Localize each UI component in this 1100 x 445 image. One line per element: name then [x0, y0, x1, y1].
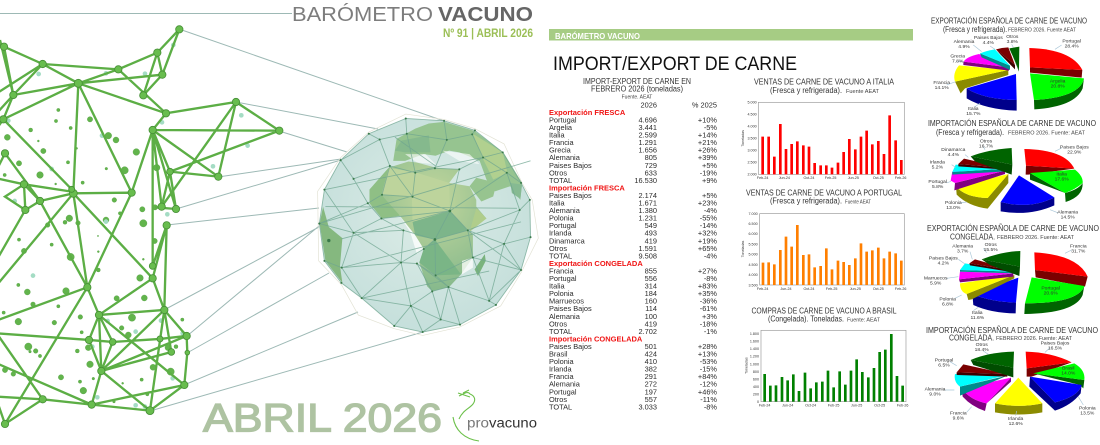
table: importación fresca: Dinamarca	[549, 236, 586, 245]
table: exportación fresca: Paises Bajos	[549, 161, 592, 170]
bar chart: compras a Brasil: Feb-26	[897, 403, 908, 407]
table: exportación congelada: Portugal	[549, 274, 577, 283]
pie 2 title: FEBRERO 2026. Fuente: AEAT	[1008, 130, 1085, 136]
table: exportación congelada	[549, 259, 717, 336]
table: exportación fresca: Italia	[549, 131, 566, 140]
section bar	[549, 29, 913, 41]
bar chart: compras a Brasil: 0	[757, 400, 759, 404]
table: importación fresca: 493	[645, 229, 657, 238]
bar chart: compras a Brasil: Jun-25	[851, 403, 862, 407]
table heading: IMPORT-EXPORT DE CARNE EN	[583, 77, 691, 86]
table: exportación fresca: Portugal	[549, 116, 577, 124]
table: exportación congelada: Alemania	[549, 312, 581, 321]
bar chart: compras a Brasil: Oct-24	[805, 403, 816, 407]
chart heading: compras a Brasil: COMPRAS DE CARNE DE VACUNO A BRASIL	[752, 306, 897, 316]
pie 1 graphic: Grecia	[950, 53, 965, 59]
table: importación congelada: Otros	[549, 395, 567, 404]
pie 1 graphic: 20.8%	[1051, 84, 1065, 90]
table heading: Fuente. AEAT	[622, 94, 652, 100]
pie 1 graphic: Paises Bajos	[974, 35, 1003, 41]
header: Barómetro Vacuno: VACUNO	[438, 4, 533, 26]
table: exportación congelada: 855	[645, 266, 657, 276]
table: importación fresca: 1.231	[638, 214, 657, 223]
pie 3 graphic: 15.5%	[984, 247, 998, 253]
pie 3 graphic: 6.8%	[942, 301, 954, 307]
table: importación fresca: Irlanda	[549, 229, 572, 238]
pie 1 graphic: 7.8%	[952, 58, 964, 64]
chart heading: ventas a Italia	[754, 78, 895, 95]
logo: provacuno	[453, 390, 537, 441]
pie 3 graphic: Portugal	[1041, 285, 1060, 291]
table: importación fresca: +32%	[698, 229, 717, 238]
table: importación congelada: -53%	[700, 357, 717, 366]
table: exportación congelada: -61%	[700, 304, 717, 313]
bar chart: compras a Brasil: Feb-25	[828, 403, 839, 407]
pie 1 title	[931, 16, 1087, 34]
table: importación congelada: Francia	[549, 372, 575, 381]
pie 4 title	[926, 326, 1098, 342]
table: exportación fresca	[549, 108, 717, 185]
table: exportación congelada: 160	[645, 297, 657, 306]
table: importación fresca: Portugal	[549, 221, 577, 230]
table: exportación fresca: +14%	[698, 131, 717, 140]
pie chart 1: exportación fresca	[931, 16, 1087, 117]
table: exportación fresca: Francia	[549, 138, 575, 147]
table: exportación fresca: +39%	[698, 153, 717, 162]
header: Barómetro Vacuno	[292, 3, 533, 40]
pie 2 graphic: Italia	[1056, 172, 1067, 178]
table: importación congelada: -12%	[700, 380, 717, 389]
land masses	[320, 122, 522, 291]
table: importación fresca: Importación FRESCA	[549, 184, 625, 192]
bar chart: ventas a Italia	[741, 101, 906, 180]
pie 2 graphic: Otros	[980, 138, 993, 144]
bar chart: compras a Brasil: 400	[753, 385, 759, 389]
bar chart: ventas a Portugal: 4.000	[749, 273, 758, 277]
large date: Abril 2026: ABRIL 2026	[203, 396, 442, 440]
pie 1 graphic: Portugal	[1062, 39, 1081, 45]
table: exportación fresca: 16.530	[634, 176, 657, 185]
table: exportación congelada: Exportación CONGELADA	[549, 259, 643, 268]
table: importación congelada: 291	[645, 372, 657, 381]
pie 2 graphic: 22.9%	[1067, 150, 1082, 156]
pie 3 graphic	[924, 242, 1088, 321]
table: importación fresca: 2.174	[638, 191, 657, 200]
table: importación congelada: +28%	[698, 342, 717, 351]
pie 4 title: FEBRERO 2026. Fuente: AEAT	[996, 336, 1072, 342]
pie 3 graphic: 31.7%	[1071, 248, 1086, 254]
table: importación fresca: +5%	[702, 191, 717, 200]
pie 4 graphic: Paises Bajos	[1041, 340, 1070, 346]
table: exportación congelada: 114	[645, 304, 657, 313]
table: exportación fresca: 2.599	[638, 131, 657, 140]
table heading: FEBRERO 2026 (toneladas)	[591, 84, 683, 94]
bar chart: ventas a Portugal: Feb-26	[895, 287, 906, 291]
pie 4 graphic	[925, 340, 1096, 427]
table: exportación congelada: Italia	[549, 282, 566, 291]
pie 1 graphic: Italia	[968, 106, 979, 112]
bar chart: ventas a Italia: Feb-26	[895, 176, 906, 180]
pie 4 graphic: 14.0%	[1061, 371, 1076, 377]
pie 2 graphic: 5.8%	[932, 184, 944, 190]
table: importación congelada: 272	[645, 380, 657, 389]
bar chart: compras a Brasil: 1.600	[750, 339, 759, 343]
bar chart: ventas a Italia: Feb-25	[825, 176, 836, 180]
pie 3 title: CONGELADA.	[950, 232, 995, 242]
table: importación fresca: -4%	[704, 251, 717, 260]
pie 1 graphic: Otros	[1006, 34, 1019, 40]
bar chart: ventas a Italia: Feb-24	[757, 176, 768, 180]
table: importación fresca: -55%	[700, 214, 717, 223]
table: importación fresca: Otros	[549, 244, 567, 253]
header: Barómetro Vacuno: BARÓMETRO	[292, 3, 433, 26]
logo: provacuno: pro	[467, 416, 489, 430]
table: exportación congelada: Francia	[549, 266, 575, 276]
table: exportación congelada: -36%	[700, 297, 717, 306]
pie 1 graphic: 4.9%	[958, 44, 970, 50]
table: exportación fresca: Argelia	[549, 123, 573, 132]
pie chart 3: exportación congelada	[924, 224, 1099, 321]
pie 1 graphic: 14.1%	[935, 85, 949, 91]
scattered dots	[2, 108, 184, 403]
table: importación fresca: Paises Bajos	[549, 191, 592, 200]
table: exportación fresca: 805	[645, 153, 657, 162]
pie 2 graphic: Portugal	[928, 179, 947, 185]
bar chart: ventas a Italia: 4.500	[748, 113, 757, 117]
table: importación congelada: 557	[645, 395, 657, 404]
chart heading: ventas a Portugal: Fuente AEAT	[845, 200, 871, 206]
bar chart: ventas a Portugal: 7.000	[749, 212, 758, 216]
table: importación fresca: 9.508	[638, 251, 657, 260]
pie 4 graphic: 12.6%	[1009, 421, 1023, 427]
bar chart: compras a Brasil: 1.000	[750, 362, 759, 366]
pie 4 graphic: 13.5%	[1080, 410, 1095, 416]
pie 3 graphic: 5.9%	[930, 281, 942, 287]
table: exportación congelada: +27%	[698, 266, 717, 276]
table: importación congelada: -8%	[704, 402, 717, 411]
pie 4 title: CONGELADA.	[949, 334, 994, 342]
table: importación fresca: TOTAL	[549, 251, 572, 260]
table: exportación congelada: 419	[645, 319, 657, 328]
table: exportación fresca: 1.291	[638, 138, 657, 147]
pie 4 graphic: Francia	[950, 411, 967, 417]
bar chart: ventas a Portugal: 4.500	[749, 263, 758, 267]
table: importación congelada: 424	[645, 350, 657, 358]
pie 4 graphic: Polonia	[1079, 405, 1096, 411]
pie 1 graphic: 15.7%	[966, 111, 981, 117]
chart heading: ventas a Italia: VENTAS DE CARNE DE VACUNO A ITALIA	[754, 78, 895, 86]
bar chart: ventas a Portugal: Jun-24	[780, 287, 792, 291]
table: importación fresca: 419	[645, 236, 657, 245]
connector lines from network to globe	[0, 14, 444, 411]
pie 4 graphic: Alemania	[925, 386, 946, 392]
bar chart: compras a Brasil: Toneladas	[744, 357, 748, 374]
table: exportación congelada: 2.702	[638, 327, 657, 336]
globe vertices	[318, 117, 532, 333]
bar chart: ventas a Italia: Jun-25	[848, 176, 859, 180]
table: exportación fresca: +21%	[698, 138, 717, 147]
bar chart: ventas a Portugal: Oct-25	[873, 287, 884, 291]
bar chart: ventas a Portugal: Feb-24	[757, 287, 768, 291]
pie 2 graphic: Polonia	[945, 200, 962, 206]
pie 3 graphic: Otros	[985, 242, 997, 248]
table: exportación congelada: Polonia	[549, 289, 575, 298]
bar chart: ventas a Portugal: 6.500	[749, 222, 758, 226]
table: importación fresca: Polonia	[549, 214, 575, 223]
chart heading: compras a Brasil: (Congelada). Toneladas.	[768, 314, 844, 324]
pie 1 graphic: Alemania	[954, 39, 975, 45]
table: exportación fresca: 1.656	[638, 146, 657, 155]
pie 3 graphic: 20.6%	[1044, 290, 1058, 296]
bar chart: compras a Brasil: 1.400	[750, 347, 759, 351]
pie 2 graphic: Dinamarca	[941, 147, 966, 153]
table: exportación congelada: +83%	[698, 282, 717, 291]
table: exportación congelada: Paises Bajos	[549, 304, 592, 313]
table: importación congelada: Polonia	[549, 357, 575, 366]
table: exportación congelada: -8%	[704, 274, 717, 283]
bar chart: ventas a Italia: 2.500	[748, 161, 757, 165]
table: importación congelada: +13%	[698, 350, 717, 358]
bar chart: ventas a Italia: 2.000	[748, 173, 757, 177]
pie 3 graphic: Polonia	[939, 296, 956, 302]
bar chart: ventas a Italia: 5.000	[748, 101, 757, 105]
table: importación congelada: 3.033	[638, 402, 657, 411]
table: importación fresca: 1.591	[638, 244, 657, 253]
table: exportación fresca: -19%	[700, 168, 717, 177]
table heading: % 2025	[692, 100, 717, 110]
bar chart: ventas a Portugal: Toneladas	[741, 240, 745, 257]
pie 4 graphic: 9.0%	[929, 391, 941, 397]
table: importación congelada: -11%	[700, 395, 717, 404]
table: importación fresca: +65%	[698, 244, 717, 253]
table: exportación congelada: +35%	[698, 289, 717, 298]
pie 4 graphic: 18.4%	[975, 347, 989, 353]
pie 2 graphic: Paises Bajos	[1060, 145, 1089, 151]
pie 2 graphic: 4.4%	[948, 152, 960, 158]
table: exportación congelada: Marruecos	[549, 297, 584, 306]
bar chart: ventas a Italia: Toneladas	[741, 130, 745, 147]
pie 3 graphic: 3.7%	[957, 248, 969, 254]
pie 3 title	[927, 224, 1099, 242]
page title: IMPORT/EXPORT DE CARNE	[553, 54, 797, 75]
table: exportación fresca: -5%	[704, 123, 717, 132]
table: importación fresca: Italia	[549, 198, 566, 208]
table: importación congelada: 197	[645, 387, 657, 396]
chart heading: ventas a Italia: Fuente AEAT	[846, 89, 879, 95]
pie 1 title: FEBRERO 2026. Fuente AEAT	[1008, 28, 1076, 34]
bar chart: ventas a Italia: 3.000	[748, 149, 757, 153]
bar chart: compras a Brasil: Feb-24	[759, 403, 770, 407]
table: importación fresca: 1.380	[638, 206, 657, 215]
pie 2 title	[928, 119, 1096, 137]
table: importación congelada: 382	[645, 365, 657, 374]
bar chart: ventas a Portugal: Jun-25	[850, 287, 861, 291]
pie 3 graphic: 4.2%	[938, 261, 950, 267]
table: exportación fresca: 729	[645, 161, 657, 170]
pie 3 graphic: Francia	[1070, 243, 1087, 249]
table: exportación congelada: +3%	[702, 312, 717, 321]
table: importación fresca: 549	[645, 221, 657, 230]
table: importación congelada: Importación CONGELADA	[549, 334, 643, 344]
table: importación fresca: +19%	[698, 236, 717, 245]
table: importación fresca: Alemania	[549, 206, 581, 215]
section bar: BARÓMETRO VACUNO	[555, 30, 640, 41]
table: importación congelada: Portugal	[549, 387, 577, 396]
pie chart 4: importación congelada	[925, 326, 1098, 427]
bar chart: ventas a Portugal: Feb-25	[826, 287, 837, 291]
table: importación congelada: TOTAL	[549, 402, 572, 411]
pie 1 graphic: 4.4%	[983, 40, 995, 46]
bar chart: ventas a Portugal: 5.500	[749, 242, 758, 246]
table: exportación congelada: 556	[645, 274, 657, 283]
pie 1 graphic	[933, 34, 1084, 117]
table heading: 2026	[641, 100, 657, 110]
pie 4 graphic: Irlanda	[1008, 416, 1023, 422]
table: importación congelada: +84%	[698, 372, 717, 381]
table: exportación fresca: 633	[645, 168, 657, 177]
table: importación congelada: Irlanda	[549, 365, 572, 374]
bar chart: ventas a Italia: 4.000	[748, 125, 757, 129]
table: exportación congelada: 100	[645, 312, 657, 321]
chart heading: ventas a Portugal: VENTAS DE CARNE DE VACUNO A PORTUGAL	[746, 188, 902, 198]
table: importación congelada	[549, 334, 717, 411]
chart heading: compras a Brasil: Fuente: AEAT	[847, 318, 880, 324]
bar chart: ventas a Portugal: 5.000	[749, 253, 758, 257]
table: exportación fresca: Alemania	[549, 153, 581, 162]
table: exportación congelada: TOTAL	[549, 327, 572, 336]
bar chart: ventas a Italia: Jun-24	[779, 176, 790, 180]
pie 4 graphic: 9.6%	[953, 416, 965, 422]
table: exportación congelada: -18%	[700, 319, 717, 328]
pie 4 graphic: Brasil	[1062, 366, 1075, 372]
bar chart: compras a Brasil: Oct-25	[874, 403, 885, 407]
pie 2 graphic: 13.0%	[946, 205, 961, 211]
table: importación congelada: 501	[645, 342, 657, 351]
bar chart: ventas a Portugal	[741, 212, 906, 291]
pie 2 graphic	[928, 138, 1089, 221]
pie 3 graphic: Paises Bajos	[929, 256, 958, 262]
table: exportación fresca: Otros	[549, 168, 567, 177]
pale teal dots	[6, 43, 250, 409]
pie 1 graphic: 3.8%	[1007, 39, 1019, 45]
table: importación congelada: 410	[645, 357, 657, 366]
pie 3 graphic: 11.6%	[970, 315, 985, 321]
table: exportación fresca: +26%	[698, 146, 717, 155]
bar chart: compras a Brasil: Jun-24	[782, 403, 793, 407]
table: exportación fresca: Grecia	[549, 146, 572, 155]
pie 4 graphic: 16.5%	[1048, 345, 1063, 351]
network edges	[0, 29, 279, 424]
table: exportación congelada: 314	[645, 282, 657, 291]
pie 1 graphic: Argelia	[1050, 79, 1066, 85]
table heading	[583, 77, 717, 110]
pie 2 graphic: 5.2%	[932, 165, 944, 171]
globe	[318, 114, 538, 335]
table: exportación fresca: Exportación FRESCA	[549, 108, 626, 117]
table: importación congelada: Paises Bajos	[549, 342, 592, 351]
table: importación congelada: +46%	[698, 387, 717, 396]
header: Barómetro Vacuno: Nº 91 | ABRIL 2026	[443, 26, 533, 40]
table: exportación fresca: +5%	[702, 161, 717, 170]
table: exportación congelada: 184	[645, 289, 657, 298]
pie 2 graphic: 14.5%	[1061, 215, 1075, 221]
pie 1 graphic: Francia	[933, 80, 950, 86]
bar chart: ventas a Italia: 3.500	[748, 137, 757, 141]
pie 2 title: (Fresca y refrigerada).	[936, 128, 1004, 137]
table: exportación fresca: 4.696	[638, 116, 657, 124]
bar chart: ventas a Italia: Oct-25	[873, 176, 884, 180]
bar chart: ventas a Portugal: Oct-24	[803, 287, 814, 291]
table: importación congelada: Brasil	[549, 350, 568, 358]
pie 2 graphic: Alemania	[1057, 210, 1078, 216]
pie 1 graphic: 28.4%	[1065, 44, 1079, 50]
pie 2 graphic: 16.7%	[979, 143, 994, 149]
table: importación congelada: -15%	[700, 365, 717, 374]
pie 2 graphic: Irlanda	[930, 160, 945, 166]
bar chart: compras a Brasil: 800	[753, 370, 759, 374]
bar chart: ventas a Portugal: 3.500	[749, 283, 758, 287]
pie 3 title: FEBRERO 2026. Fuente: AEAT	[997, 235, 1074, 241]
pie 2 graphic: 17.6%	[1055, 177, 1069, 183]
table: importación fresca: -4%	[704, 206, 717, 215]
logo: provacuno: vacuno	[489, 416, 537, 430]
table: importación fresca: 1.671	[638, 198, 657, 208]
pie 4 graphic: Portugal	[935, 358, 953, 364]
pie 4 graphic: 6.5%	[938, 363, 950, 369]
table: importación fresca	[549, 184, 717, 260]
network nodes	[0, 26, 283, 428]
green network illustration	[0, 26, 283, 428]
bar chart: compras a Brasil: 200	[753, 393, 759, 397]
table: importación fresca: -14%	[700, 221, 717, 230]
pie 4 graphic: Otros	[976, 342, 988, 348]
bar chart: compras a Brasil: 1.800	[750, 332, 759, 336]
table: exportación congelada: Otros	[549, 319, 567, 328]
pie 3 graphic: Italia	[972, 310, 983, 316]
chart heading: ventas a Portugal: (Fresca y refrigerada).	[770, 196, 842, 206]
table: exportación fresca: +9%	[702, 176, 717, 185]
pie 3 graphic: Marruecos	[924, 276, 948, 282]
table: importación congelada: Alemania	[549, 380, 581, 389]
table: exportación congelada: -1%	[704, 327, 717, 336]
bar chart: ventas a Portugal: 6.000	[749, 232, 758, 236]
pie 1 title: (Fresca y refrigerada).	[943, 25, 1007, 34]
table: importación fresca: +23%	[698, 198, 717, 208]
bar chart: compras a Brasil	[744, 330, 908, 407]
pie chart 2: importación fresca	[928, 119, 1096, 221]
bar chart: compras a Brasil: 1.200	[750, 355, 759, 359]
chart heading: ventas a Italia: (Fresca y refrigerada).	[770, 86, 842, 95]
chart heading: ventas a Portugal	[746, 188, 902, 206]
bar chart: ventas a Italia: Oct-24	[803, 176, 814, 180]
chart heading: compras a Brasil	[752, 306, 897, 324]
pie 3 graphic: Alemania	[952, 243, 973, 249]
table: exportación fresca: 3.441	[638, 123, 657, 132]
table: exportación fresca: +10%	[698, 116, 717, 124]
table: exportación fresca: TOTAL	[549, 176, 572, 185]
bar chart: compras a Brasil: 600	[753, 378, 759, 382]
globe mesh lines	[319, 118, 531, 332]
